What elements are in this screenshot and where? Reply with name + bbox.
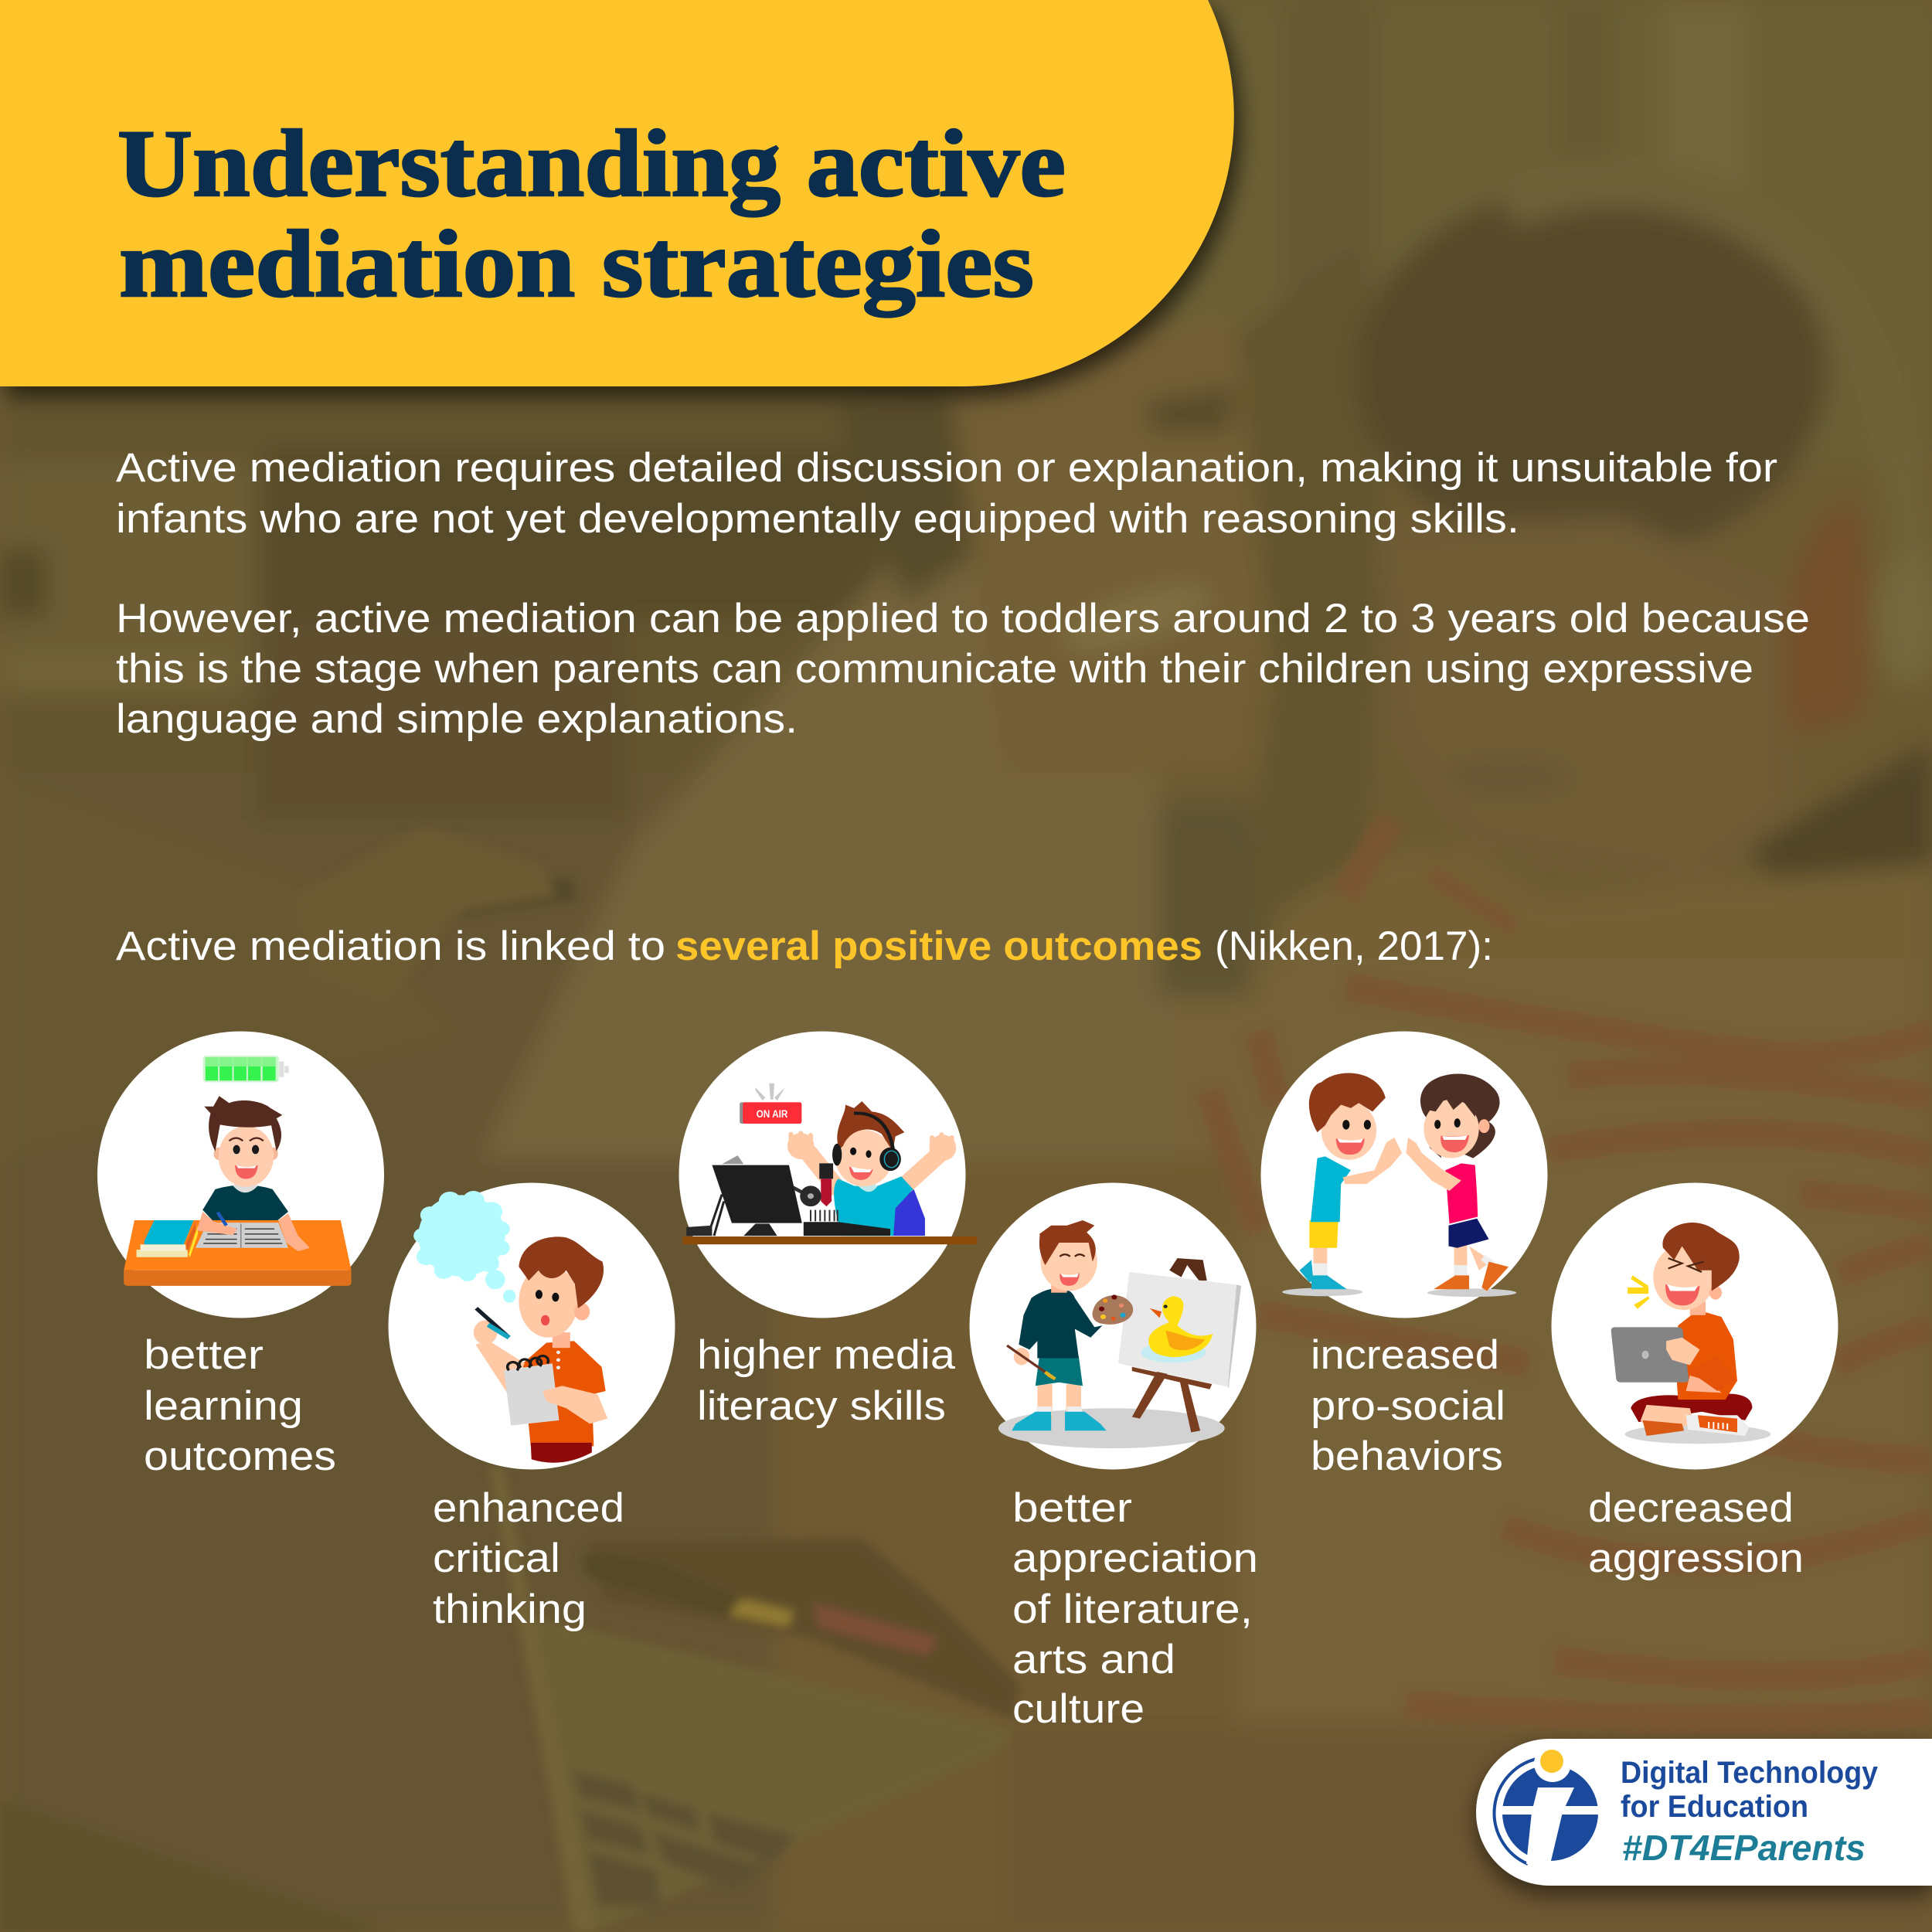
label: higher media literacy skills: literacy skills — [697, 1383, 946, 1429]
logo text: for Education — [1621, 1790, 1808, 1824]
logo badge: Digital Technology for Education — [1476, 1739, 1932, 1895]
title — [117, 111, 1066, 318]
outcomes lead-in sentence: Active mediation is linked to — [116, 923, 665, 969]
icon: boy thinking with notepad — [413, 1191, 607, 1463]
icon: laughing boy with tablet — [1611, 1223, 1770, 1444]
label: increased pro-social behaviors: increased — [1311, 1332, 1499, 1378]
label: decreased aggression — [1588, 1485, 1804, 1581]
logo text — [1621, 1756, 1879, 1868]
label: better appreciation of literature, arts and culture: of literature, — [1012, 1587, 1253, 1632]
label: increased pro-social behaviors — [1311, 1332, 1505, 1479]
label: better learning outcomes: learning — [144, 1383, 303, 1429]
label: enhanced critical thinking — [433, 1485, 624, 1632]
label: higher media literacy skills: higher media — [697, 1332, 956, 1378]
label: enhanced critical thinking: critical — [433, 1536, 560, 1581]
icon: boy painting a duck on an easel — [998, 1220, 1241, 1448]
title: Understanding active — [117, 111, 1066, 217]
outcome 6: decreased aggression — [1552, 1182, 1838, 1470]
intro paragraph 2: However, active mediation can be applied to toddlers around 2 to 3 years old because — [116, 596, 1810, 641]
icon: boy studying at desk — [124, 1056, 352, 1286]
label: increased pro-social behaviors: behaviors — [1311, 1434, 1503, 1479]
icon: logo mark — [1495, 1745, 1601, 1864]
outcome 5: increased pro-social behaviors — [1261, 1031, 1547, 1318]
logo text: #DT4EParents — [1622, 1828, 1866, 1868]
label: better learning outcomes: outcomes — [144, 1434, 336, 1479]
outcome 3: higher media literacy skills — [679, 1031, 977, 1318]
outcomes lead-in sentence — [116, 923, 1493, 969]
outcomes lead-in sentence: several positive outcomes — [675, 923, 1202, 969]
label: better appreciation of literature, arts and culture: appreciation — [1012, 1536, 1258, 1581]
intro paragraph 1: Active mediation requires detailed discussion or explanation, making it unsuitable for — [116, 445, 1777, 491]
intro paragraph 2 — [116, 596, 1810, 742]
outcomes lead-in sentence: (Nikken, 2017): — [1215, 923, 1493, 969]
intro paragraph 2: language and simple explanations. — [116, 696, 798, 742]
label: higher media literacy skills — [697, 1332, 956, 1429]
icon: two kids high-fiving — [1282, 1073, 1516, 1297]
logo text: Digital Technology — [1621, 1756, 1879, 1790]
label: better appreciation of literature, arts and culture: better — [1012, 1485, 1132, 1531]
header banner — [0, 0, 1240, 396]
intro paragraph 2: this is the stage when parents can communicate with their children using expressive — [116, 646, 1753, 692]
outcome 2: enhanced critical thinking — [388, 1182, 675, 1470]
title: mediation strategies — [119, 211, 1034, 318]
label: increased pro-social behaviors: pro-social — [1311, 1383, 1505, 1429]
intro paragraph 1 — [116, 445, 1777, 542]
label: better learning outcomes: better — [144, 1332, 264, 1378]
label: better learning outcomes — [144, 1332, 336, 1479]
intro paragraph 1: infants who are not yet developmentally equipped with reasoning skills. — [116, 496, 1519, 542]
label: better appreciation of literature, arts and culture: culture — [1012, 1686, 1145, 1732]
label: decreased aggression: decreased — [1588, 1485, 1794, 1531]
icon: boy broadcasting on air: ON AIR — [757, 1109, 788, 1121]
label: enhanced critical thinking: enhanced — [433, 1485, 624, 1531]
outcome 4: better appreciation of literature, arts and culture — [969, 1182, 1257, 1470]
label: better appreciation of literature, arts and culture — [1012, 1485, 1258, 1732]
icon: boy broadcasting on air — [682, 1083, 977, 1244]
label: decreased aggression: aggression — [1588, 1536, 1804, 1581]
label: better appreciation of literature, arts and culture: arts and — [1012, 1637, 1175, 1682]
label: enhanced critical thinking: thinking — [433, 1587, 587, 1632]
outcome 1: better learning outcomes — [97, 1031, 384, 1318]
